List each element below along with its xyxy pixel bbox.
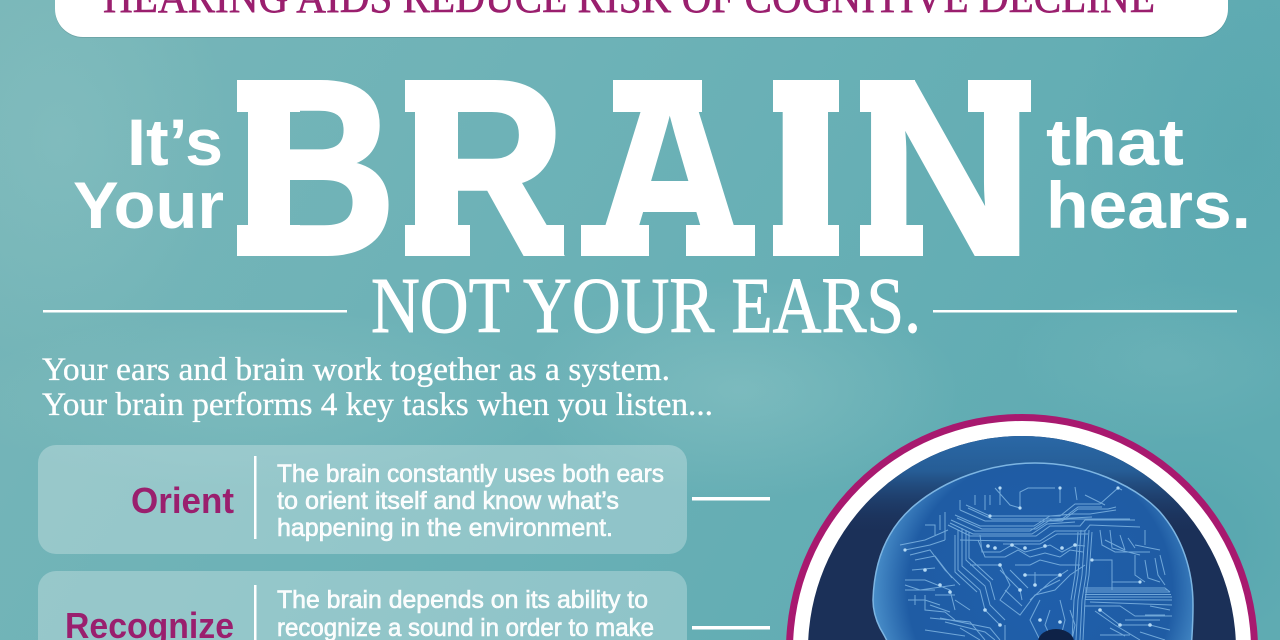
headline BRAIN: N <box>857 28 1034 307</box>
headline BRAIN: R <box>402 28 566 307</box>
connector: Recognize <box>692 626 770 630</box>
brain illustration <box>786 414 1258 640</box>
top banner <box>55 0 1228 38</box>
intro text: Your ears and brain work together as a system. <box>42 352 670 388</box>
head silhouette <box>873 463 1193 640</box>
connector: Orient <box>692 497 770 500</box>
headline right words <box>1046 105 1251 242</box>
dark ear canal spot <box>1038 629 1074 640</box>
panel: Orient <box>38 445 687 554</box>
headline: It's Your BRAIN that hears. <box>73 28 1251 308</box>
headline right words: hears. <box>1046 168 1251 242</box>
label: Orient: Orient <box>131 480 234 521</box>
dark disc <box>800 430 1244 640</box>
headline right words: that <box>1046 105 1184 179</box>
headline left words <box>73 105 224 242</box>
description: Orient: The brain constantly uses both ears <box>277 460 664 488</box>
subheading: NOT YOUR EARS.: NOT YOUR EARS. <box>371 263 921 350</box>
headline BRAIN: I <box>766 28 845 307</box>
headline left words: Your <box>73 168 224 242</box>
circuit traces <box>900 487 1172 640</box>
headline left words: It’s <box>127 105 223 179</box>
circuit nodes <box>903 486 1152 627</box>
description: Orient: happening in the environment. <box>277 514 613 542</box>
headline BRAIN <box>235 28 1034 308</box>
headline BRAIN: B <box>235 29 397 308</box>
description: Recognize: The brain depends on its ability to <box>277 586 648 614</box>
description: Recognize <box>277 586 654 640</box>
description: Orient <box>277 460 664 542</box>
intro text <box>42 352 713 423</box>
intro text: Your brain performs 4 key tasks when you listen... <box>42 387 713 423</box>
description: Orient: to orient itself and know what’s <box>277 487 619 515</box>
headline BRAIN: A <box>593 29 746 308</box>
panel: Recognize <box>38 571 687 640</box>
purple and white ring <box>786 414 1258 640</box>
